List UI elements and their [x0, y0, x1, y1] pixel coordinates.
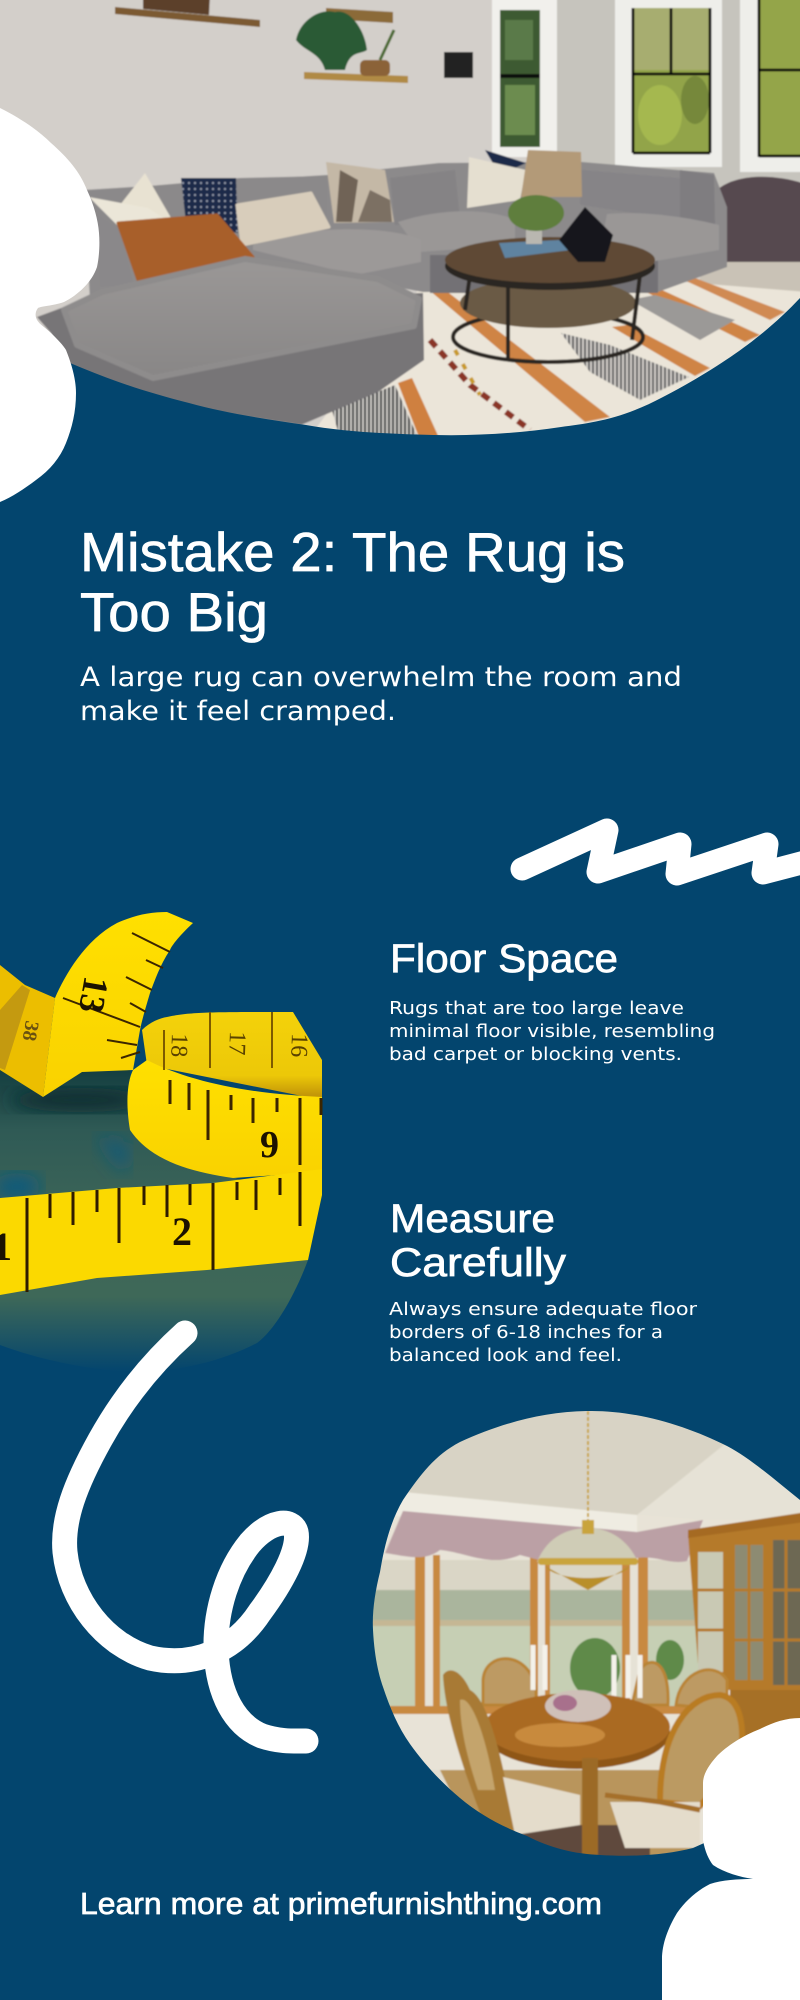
coffee table	[453, 312, 643, 362]
text block: floor space: Floor Space	[390, 937, 618, 981]
tape markings	[63, 933, 170, 1058]
text block: measure carefully: balanced look and feel.	[389, 1346, 622, 1366]
photo: yellow measuring tape: 16	[285, 1033, 312, 1058]
china cabinet	[688, 1522, 800, 1692]
text block: measure carefully: Measure	[390, 1197, 555, 1241]
title: Mistake 2: The Rug is	[80, 521, 625, 583]
photo: yellow measuring tape: 2	[172, 1209, 192, 1254]
text block: measure carefully: Carefully	[390, 1241, 566, 1285]
centerpiece	[545, 1690, 611, 1722]
rug	[317, 282, 800, 436]
chaise	[37, 293, 424, 425]
white blob: bottom right	[662, 1718, 800, 2000]
footer: website call to action: Learn more at primefurnishthing.com	[80, 1886, 602, 1921]
decorative zigzag stroke	[522, 830, 800, 874]
floor	[440, 1769, 694, 1855]
front chairs	[442, 1670, 514, 1830]
white blob: top left	[0, 108, 99, 502]
photo: yellow measuring tape: 38	[18, 1019, 43, 1043]
photo: yellow measuring tape: 13	[71, 974, 117, 1016]
subtitle: make it feel cramped.	[80, 696, 396, 727]
sofa back and base	[84, 162, 727, 300]
white curl stroke	[65, 1333, 306, 1741]
chandelier	[587, 1411, 589, 1520]
text block: measure carefully: borders of 6-18 inches for a	[389, 1323, 663, 1343]
title: Too Big	[80, 581, 268, 643]
text block: floor space: bad carpet or blocking vents.	[389, 1045, 682, 1065]
subtitle	[80, 662, 682, 727]
back chairs	[483, 1659, 536, 1705]
text block: floor space: minimal floor visible, resembling	[389, 1022, 715, 1042]
photo: living room with oversized rug	[0, 0, 800, 460]
photo: dining room	[372, 1411, 800, 1856]
table	[496, 1730, 672, 1770]
valance	[385, 1511, 703, 1562]
photo: yellow measuring tape: 18	[165, 1033, 192, 1058]
text block: floor space: Rugs that are too large leave	[389, 999, 684, 1019]
title	[80, 521, 625, 643]
subtitle: A large rug can overwhelm the room and	[80, 662, 682, 693]
plant	[570, 1638, 620, 1698]
photo: yellow measuring tape	[0, 912, 322, 1372]
photo: yellow measuring tape: 9	[260, 1124, 279, 1166]
photo: yellow measuring tape: 17	[223, 1031, 250, 1056]
candles	[533, 1645, 640, 1698]
text block: measure carefully	[389, 1197, 698, 1366]
text block: measure carefully: Always ensure adequate floor	[389, 1300, 698, 1320]
text block: floor space	[389, 937, 715, 1065]
